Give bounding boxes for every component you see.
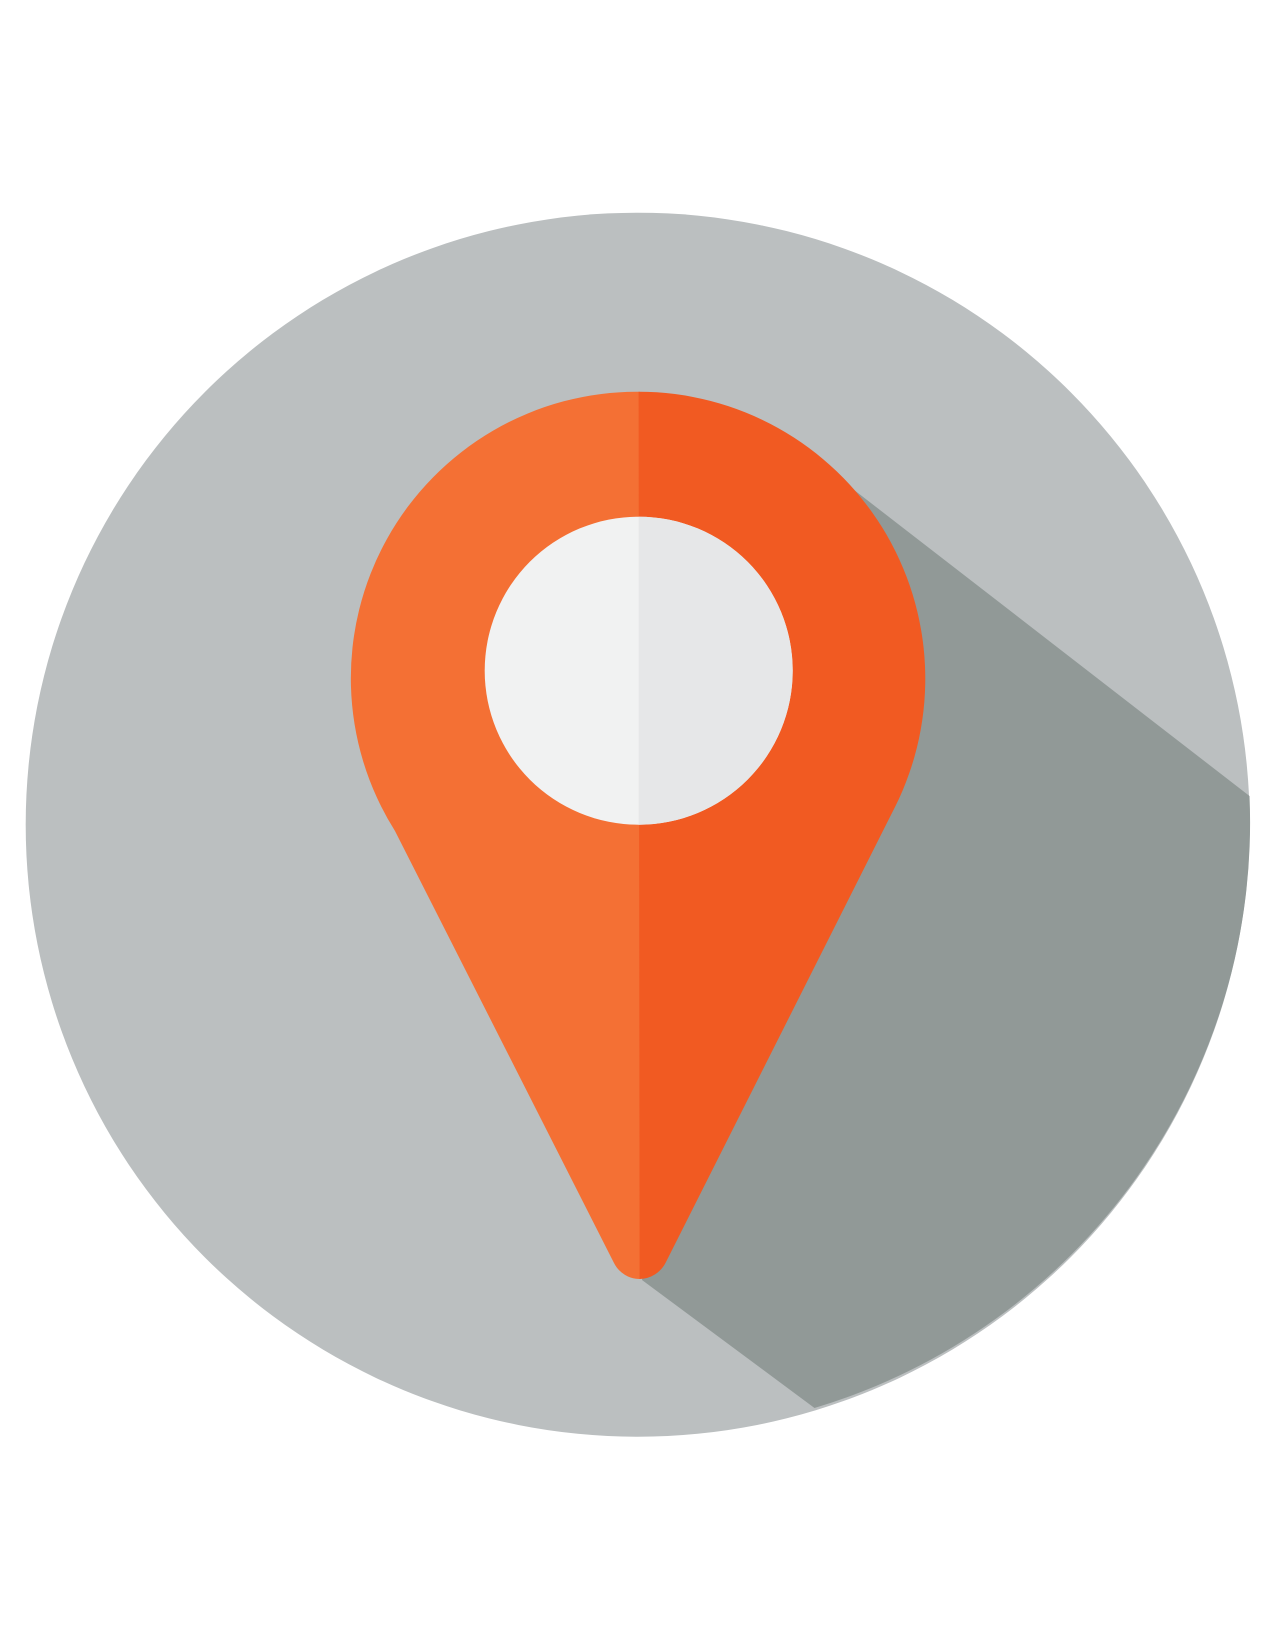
grey background circle bbox=[26, 213, 1250, 1437]
map pin bbox=[351, 392, 925, 1279]
pin right half bbox=[639, 392, 925, 1279]
pin inner circle bbox=[485, 517, 793, 825]
inner circle right half bbox=[639, 517, 793, 825]
pin left half bbox=[351, 392, 640, 1279]
inner circle left half bbox=[485, 517, 793, 825]
long shadow of pin bbox=[642, 448, 1250, 1408]
